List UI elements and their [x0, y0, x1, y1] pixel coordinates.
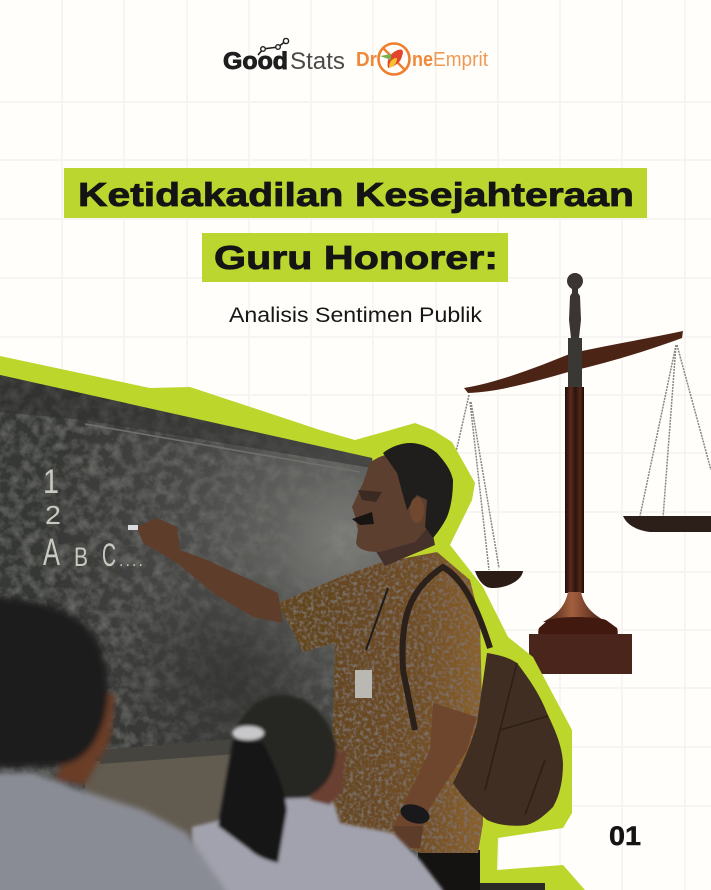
title line 2: Guru Honorer:: [214, 239, 498, 276]
trousers: [418, 850, 480, 890]
student neck: [55, 690, 115, 785]
mustache: [352, 512, 374, 525]
logo: Drone Emprit: Dr: [356, 49, 377, 71]
chalk: [128, 525, 138, 530]
student shirt right: [192, 797, 443, 890]
board ledge: [100, 730, 345, 764]
teacher: [128, 443, 563, 890]
watch: [398, 801, 432, 827]
chalk writing: 2: [45, 500, 61, 530]
green cutout shape: [0, 356, 585, 890]
student hair: [0, 598, 108, 768]
reaching arm: [137, 518, 283, 623]
scale: left pan: [475, 571, 523, 588]
scale: flare: [543, 592, 607, 622]
scale: beam: [464, 331, 683, 393]
scale: center block: [568, 338, 582, 387]
hair: [383, 443, 453, 538]
backpack strap: [402, 567, 490, 730]
wall below board: [85, 742, 345, 890]
logo: GoodStats: [223, 38, 345, 75]
student in foreground left: [0, 598, 232, 890]
classroom photo: [0, 375, 563, 890]
chalk writing: [43, 463, 143, 574]
blackboard: [0, 375, 425, 890]
lanyard: [366, 588, 388, 650]
page number: 01: [609, 821, 641, 851]
chalk writing: C: [102, 537, 116, 573]
board top rail: [85, 424, 360, 472]
student shirt left: [0, 772, 232, 890]
chalk writing: A: [43, 532, 60, 574]
scale: base block: [529, 634, 632, 674]
backpack: [453, 653, 563, 826]
scrunchie: [232, 726, 264, 740]
subtitle: Analisis Sentimen Publik: [229, 304, 483, 327]
scale: right chains: [640, 345, 711, 518]
logo: Drone Emprit: Emprit: [433, 49, 488, 71]
board top band: [0, 375, 372, 468]
title line 2: [202, 233, 508, 282]
scale: flange: [538, 617, 618, 640]
id card: [355, 670, 372, 698]
chalk writing: B: [74, 542, 88, 572]
scale of justice: [456, 273, 711, 674]
student hair: [233, 695, 336, 800]
chalk writing: 1: [43, 463, 59, 501]
neck: [372, 520, 435, 566]
scale: finial: [567, 273, 583, 338]
hand: [393, 826, 423, 848]
scale: right pan: [623, 516, 711, 532]
lower arm: [393, 703, 477, 827]
ear: [410, 497, 424, 523]
scale: pole: [565, 387, 584, 593]
face: [352, 454, 430, 552]
logo: Drone Emprit: ne: [412, 49, 433, 71]
board shadow: [110, 560, 340, 745]
eye shadow: [358, 490, 382, 502]
logo: GoodStats: Good: [223, 48, 288, 75]
title line 1: [64, 168, 647, 218]
chalk writing: ....: [119, 553, 143, 570]
title line 1: Ketidakadilan Kesejahteraan: [78, 176, 634, 213]
student neck: [310, 750, 345, 805]
backpack seam: [485, 663, 548, 815]
scale: left chains: [456, 395, 499, 570]
ponytail: [218, 740, 287, 863]
logo: GoodStats: Stats: [290, 48, 345, 75]
logo: Drone Emprit: [356, 44, 488, 74]
shirt: [278, 552, 483, 853]
bottom dark strip: [480, 883, 545, 890]
student with ponytail: [192, 695, 443, 890]
